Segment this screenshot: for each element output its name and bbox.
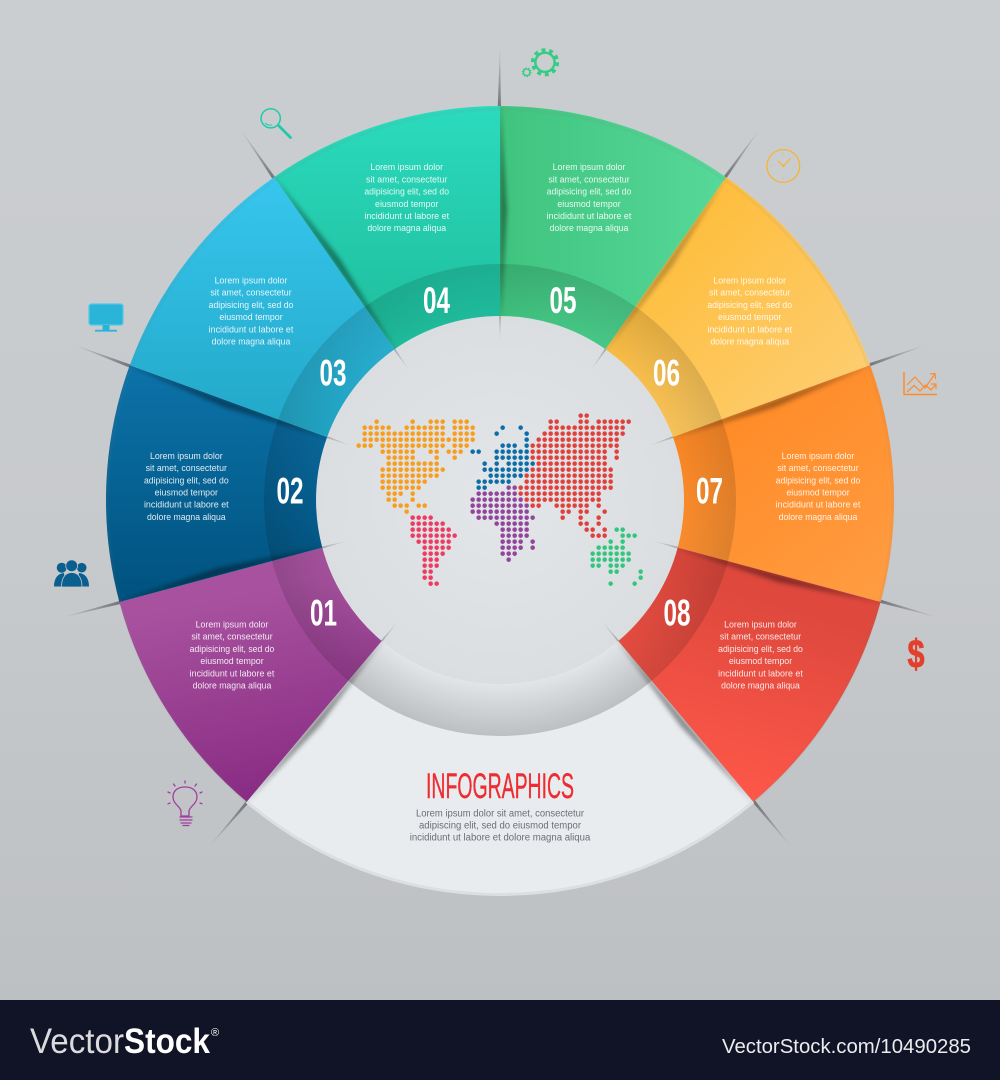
text block 02: eiusmod tempor <box>155 488 219 498</box>
Australia and Oceania dots <box>593 530 641 584</box>
text block 05: incididunt ut labore et <box>547 211 632 222</box>
text block 07: dolore magna aliqua <box>779 512 858 523</box>
text block 06: sit amet, consectetur <box>709 288 791 299</box>
number 04: 04 <box>423 280 450 321</box>
circular wheel of segments <box>106 106 894 894</box>
text block 06: Lorem ipsum dolor <box>713 276 787 286</box>
text block 02: Lorem ipsum dolor <box>150 451 223 462</box>
centre circle <box>314 314 686 686</box>
text block 06: adipisicing elit, sed do <box>707 300 792 311</box>
outer rim title panel <box>247 802 753 894</box>
North America dots <box>359 422 473 512</box>
text block 08: adipisicing elit, sed do <box>718 644 803 655</box>
segment: bottom title panel <box>247 641 753 894</box>
text block 01: sit amet, consectetur <box>191 632 273 643</box>
text block 08: eiusmod tempor <box>729 656 793 667</box>
icon: monitor <box>89 304 123 332</box>
icon: clock <box>767 150 800 182</box>
title panel body text: incididunt ut labore et dolore magna aliqua <box>410 832 591 843</box>
text block 05: sit amet, consectetur <box>548 174 630 185</box>
text block 08: incididunt ut labore et <box>718 668 803 679</box>
text block 03: Lorem ipsum dolor <box>215 276 288 286</box>
text block 04: sit amet, consectetur <box>366 174 448 185</box>
text block 01: adipisicing elit, sed do <box>190 644 274 655</box>
text block 02: adipisicing elit, sed do <box>144 475 229 486</box>
footer logo: VectorStock: ® <box>211 1027 219 1039</box>
outer rim coloured segments <box>107 109 893 802</box>
text block 04: dolore magna aliqua <box>367 223 447 234</box>
footer bar <box>0 1000 1000 1080</box>
text block 04: incididunt ut labore et <box>364 211 449 222</box>
text block 02: sit amet, consectetur <box>146 463 228 474</box>
inner band extra shading on title panel <box>348 666 652 736</box>
title panel body text: adipiscing elit, sed do eiusmod tempor <box>419 820 582 831</box>
text block 07: Lorem ipsum dolor <box>782 451 855 462</box>
number 03: 03 <box>320 352 346 394</box>
text block 07: adipisicing elit, sed do <box>776 475 860 486</box>
text block 07: incididunt ut labore et <box>776 500 861 511</box>
text block 05: Lorem ipsum dolor <box>553 162 626 173</box>
segment 05 green <box>500 106 726 349</box>
text block 06 <box>707 276 792 348</box>
text block 03: sit amet, consectetur <box>210 288 292 299</box>
footer logo: VectorStock: Stock <box>124 1022 210 1061</box>
text block 01: dolore magna aliqua <box>193 680 272 692</box>
icon: people group <box>54 560 89 587</box>
segment 02 blue <box>106 365 327 602</box>
text block 03: adipisicing elit, sed do <box>209 300 293 311</box>
text block 06: incididunt ut labore et <box>707 324 792 335</box>
segment 08 red <box>618 548 881 802</box>
text block 04: adipisicing elit, sed do <box>364 187 449 198</box>
segment 03 sky blue <box>130 177 395 437</box>
segment 04 teal <box>274 106 500 349</box>
text block 07 <box>776 451 861 523</box>
segment 06 yellow <box>606 177 870 437</box>
text block 02: dolore magna aliqua <box>147 512 226 523</box>
text block 03: incididunt ut labore et <box>209 324 294 335</box>
text block 01: eiusmod tempor <box>200 656 264 667</box>
segment 01 purple <box>119 548 382 802</box>
Europe dots <box>473 428 533 488</box>
text block 08 <box>718 620 803 692</box>
text block 04: eiusmod tempor <box>375 199 439 210</box>
fold shadows between segments <box>114 100 886 806</box>
Africa dots <box>473 488 533 560</box>
text block 01: Lorem ipsum dolor <box>196 620 269 630</box>
icon: line chart <box>904 372 937 394</box>
text block 05: dolore magna aliqua <box>550 223 629 234</box>
text block 07: eiusmod tempor <box>786 488 850 498</box>
footer URL text: VectorStock.com/10490285 <box>722 1036 971 1058</box>
text block 03 <box>209 276 294 348</box>
icon: gears <box>522 50 557 77</box>
text block 01 <box>190 620 275 692</box>
text block 04: Lorem ipsum dolor <box>370 162 444 173</box>
number 01: 01 <box>310 592 337 634</box>
text block 07: sit amet, consectetur <box>777 463 859 474</box>
text block 08: Lorem ipsum dolor <box>724 620 798 630</box>
text block 06: eiusmod tempor <box>718 312 782 323</box>
icon: light bulb <box>168 781 202 826</box>
text block 05 <box>547 162 632 234</box>
title panel body text: Lorem ipsum dolor sit amet, consectetur <box>416 808 585 819</box>
footer logo: VectorStock: Vector <box>30 1022 124 1061</box>
text block 02: incididunt ut labore et <box>144 500 229 511</box>
segment 07 orange <box>673 365 894 602</box>
title panel body text <box>410 808 591 843</box>
text block 03: eiusmod tempor <box>219 312 283 323</box>
text block 08: dolore magna aliqua <box>721 680 800 692</box>
number 07: 07 <box>696 470 723 512</box>
text block 04 <box>364 162 449 234</box>
icon: dollar sign: $ <box>908 632 924 676</box>
footer logo: VectorStock <box>30 1022 219 1061</box>
South America dots <box>413 518 455 584</box>
number 02: 02 <box>276 470 304 512</box>
Asia dots <box>521 416 629 536</box>
text block 02 <box>144 451 229 523</box>
number 06: 06 <box>653 352 680 394</box>
icon: magnifier <box>261 109 290 138</box>
text block 01: incididunt ut labore et <box>190 668 275 679</box>
number 05: 05 <box>550 280 576 321</box>
text block 03: dolore magna aliqua <box>212 336 291 348</box>
heading: INFOGRAPHICS: INFOGRAPHICS <box>426 767 574 806</box>
text block 06: dolore magna aliqua <box>710 336 790 348</box>
inner translucent band <box>290 290 710 710</box>
text block 05: eiusmod tempor <box>557 199 621 210</box>
number 08: 08 <box>664 592 690 634</box>
text block 08: sit amet, consectetur <box>720 632 802 643</box>
text block 05: adipisicing elit, sed do <box>547 187 631 198</box>
world map made of dots <box>359 416 641 584</box>
fold spokes radiating from the wheel <box>59 44 941 851</box>
